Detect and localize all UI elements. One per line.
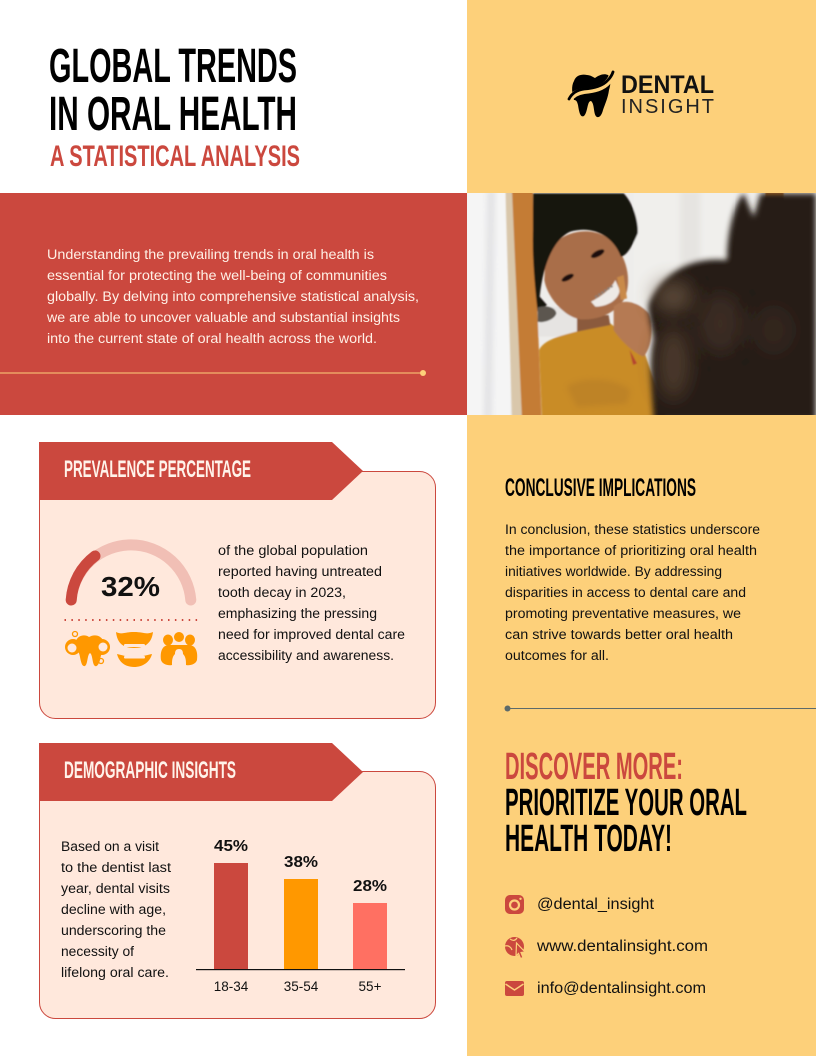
- panel: red introduction: globally. By delving into comprehensive statistical analysis,: [47, 289, 419, 304]
- call to action heading: HEALTH TODAY!: [505, 818, 672, 860]
- panel: red introduction: into the current state of oral health across the world.: [47, 331, 377, 346]
- panel: conclusive implications: In conclusion, these statistics underscore: [505, 522, 760, 537]
- text: demographic description: necessity of: [61, 944, 134, 959]
- title: IN ORAL HEALTH: [49, 88, 297, 141]
- contact: email: info@dentalinsight.com: [537, 980, 706, 997]
- contact: instagram: [505, 895, 655, 914]
- bar chart: visits by age: 18-34: [214, 979, 249, 994]
- panel: conclusive implications: can strive towards better oral health: [505, 627, 733, 642]
- heading ribbon: demographic insights: [39, 743, 363, 801]
- heading ribbon: prevalence percentage: [39, 442, 363, 500]
- gauge chart: 32%: [71, 545, 191, 602]
- bar chart: visits by age: [196, 838, 405, 994]
- text: demographic description: to the dentist last: [61, 860, 171, 875]
- panel: conclusive implications: the importance of prioritizing oral health: [505, 543, 757, 558]
- heading ribbon: prevalence percentage: PREVALENCE PERCENTAGE: [64, 456, 251, 483]
- logo: Dental Insight: [569, 71, 714, 118]
- panel: conclusive implications: promoting preventative measures, we: [505, 606, 741, 621]
- bar chart: visits by age: 38%: [284, 854, 318, 871]
- bar chart: visits by age: 45%: [214, 838, 248, 855]
- panel: red introduction: Understanding the prevailing trends in oral health is: [47, 247, 374, 262]
- text: demographic description: decline with age,: [61, 902, 166, 917]
- text: prevalence description: need for improved dental care: [218, 627, 405, 642]
- text: prevalence description: tooth decay in 2023,: [218, 585, 346, 600]
- gauge chart: 32%: 32%: [101, 571, 160, 602]
- text: demographic description: lifelong oral care.: [61, 965, 169, 980]
- text: prevalence description: emphasizing the pressing: [218, 606, 377, 621]
- call to action heading: [505, 746, 747, 860]
- text: demographic description: [61, 839, 171, 980]
- logo: Dental Insight: DENTAL: [621, 71, 714, 99]
- bar chart: visits by age: 28%: [353, 878, 387, 895]
- heading ribbon: demographic insights: DEMOGRAPHIC INSIGHTS: [64, 757, 236, 784]
- text: prevalence description: of the global population: [218, 543, 368, 558]
- panel: conclusive implications: initiatives worldwide. By addressing: [505, 564, 722, 579]
- panel: conclusive implications: [504, 474, 816, 712]
- text: demographic description: year, dental visits: [61, 881, 170, 896]
- contact: website: www.dentalinsight.com: [536, 938, 708, 955]
- title: [49, 40, 300, 173]
- contact: website: [505, 937, 708, 958]
- icons: dental problems: [65, 632, 197, 667]
- panel: demographic insights: [39, 743, 436, 1018]
- title: A STATISTICAL ANALYSIS: [50, 140, 300, 173]
- panel: prevalence percentage: [39, 442, 436, 718]
- text: demographic description: underscoring the: [61, 923, 166, 938]
- bar chart: visits by age: 35-54: [284, 979, 319, 994]
- logo: Dental Insight: INSIGHT: [621, 96, 714, 118]
- text: prevalence description: [218, 543, 405, 663]
- text: prevalence description: accessibility and awareness.: [218, 648, 394, 663]
- panel: right yellow column: [467, 0, 816, 1056]
- panel: red introduction: [0, 193, 467, 415]
- panel: conclusive implications: outcomes for all.: [505, 648, 609, 663]
- panel: red introduction: we are able to uncover valuable and substantial insights: [46, 310, 400, 325]
- bar chart: visits by age: 55+: [359, 979, 382, 994]
- contact: instagram: @dental_insight: [537, 896, 655, 913]
- text: prevalence description: reported having untreated: [218, 564, 382, 579]
- panel: red introduction: essential for protecting the well-being of communities: [47, 268, 387, 283]
- photo: child brushing teeth at mirror: [467, 190, 816, 420]
- text: demographic description: Based on a visit: [61, 839, 159, 854]
- title: GLOBAL TRENDS: [49, 40, 297, 93]
- panel: conclusive implications: disparities in access to dental care and: [505, 585, 746, 600]
